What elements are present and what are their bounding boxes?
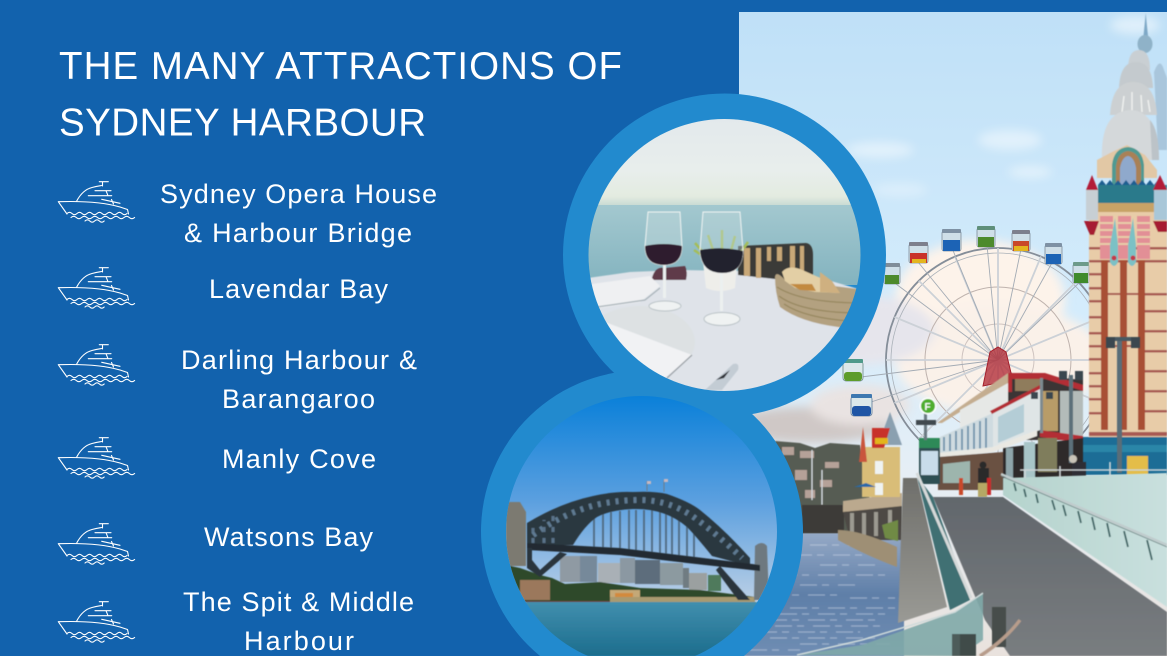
left plate and napkin xyxy=(588,276,660,308)
bread basket xyxy=(775,274,858,327)
title xyxy=(59,45,622,144)
list item: Sydney Opera House xyxy=(58,179,437,248)
right wine glass xyxy=(700,212,743,252)
list item: Manly Cove: Manly Cove xyxy=(222,444,376,474)
table xyxy=(588,270,862,392)
icon: boat 4 xyxy=(58,438,135,478)
icon: boat 3 xyxy=(58,345,135,385)
harbour water xyxy=(739,533,904,656)
city skyline xyxy=(560,556,721,591)
list item: Sydney Opera House: & Harbour Bridge xyxy=(184,218,412,248)
Luna Park buildings xyxy=(916,337,1140,497)
list item: Darling Harbour: Darling Harbour & xyxy=(181,345,417,375)
pier and sea wall xyxy=(802,412,902,567)
bridge deck xyxy=(527,543,760,571)
list item: Sydney Opera House: Sydney Opera House xyxy=(160,179,437,209)
list item: The Spit and Middle Harbour xyxy=(58,587,414,656)
candle holder xyxy=(703,262,737,291)
ring: lower circle frame xyxy=(481,370,803,656)
list item: The Spit and Middle Harbour: Harbour xyxy=(244,626,354,656)
list item: Lavendar Bay xyxy=(58,268,389,308)
list item: Darling Harbour xyxy=(58,345,417,414)
photo: Luna Park boardwalk and Ferris wheel xyxy=(730,12,1167,656)
icon: boat 1 xyxy=(58,182,135,222)
list item: The Spit and Middle Harbour: The Spit & Middle xyxy=(183,587,414,617)
Luna Park buildings: F xyxy=(924,402,931,413)
top strip xyxy=(739,0,1167,12)
dark object behind glass xyxy=(652,266,688,280)
foreground glass barrier xyxy=(797,593,1020,656)
icon: boat 5 xyxy=(58,524,135,564)
list item: Lavendar Bay: Lavendar Bay xyxy=(209,274,388,304)
clock tower xyxy=(1079,13,1167,475)
title: THE MANY ATTRACTIONS OF xyxy=(59,45,622,88)
waterfront hillside and houses xyxy=(775,441,870,535)
list item: Watsons Bay xyxy=(58,522,374,564)
list item: Watsons Bay: Watsons Bay xyxy=(204,522,374,552)
ring: upper circle frame xyxy=(563,94,886,416)
knife xyxy=(705,364,738,390)
gondolas xyxy=(843,226,1089,416)
ferris wheel xyxy=(863,247,1090,453)
walkway with railings xyxy=(898,462,1167,656)
plant xyxy=(693,230,750,256)
icon: boat 2 xyxy=(58,268,135,308)
bridge hangers xyxy=(594,510,694,558)
list item: Manly Cove xyxy=(58,438,376,478)
chair xyxy=(738,243,813,283)
front plate xyxy=(585,306,695,378)
left wine glass xyxy=(646,212,682,246)
photo circle: waterfront dining table xyxy=(585,119,862,392)
photo circle: harbour bridge xyxy=(506,396,778,656)
icon: boat 6 xyxy=(58,602,135,642)
bridge arch truss xyxy=(527,492,750,566)
list item: Darling Harbour: Barangaroo xyxy=(222,384,375,414)
title: SYDNEY HARBOUR xyxy=(59,102,426,144)
